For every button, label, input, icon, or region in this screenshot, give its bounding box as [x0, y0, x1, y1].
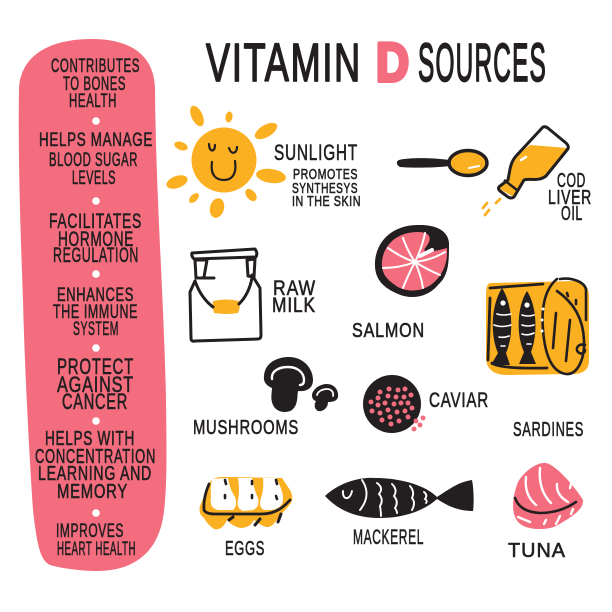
benefit: heart: HEART HEALTH	[57, 539, 136, 560]
label: cod liver oil: OIL	[561, 203, 583, 225]
benefit: concentration: HELPS WITH	[45, 428, 135, 450]
icon: caviar	[363, 375, 426, 433]
benefit: blood sugar: LEVELS	[72, 168, 116, 189]
label: raw milk: RAW	[273, 277, 316, 300]
icon: mushrooms	[264, 357, 338, 412]
benefit: cancer: AGAINST	[57, 372, 134, 397]
benefit: bones: CONTRIBUTES	[51, 56, 140, 77]
benefit: immune system: SYSTEM	[73, 319, 119, 340]
benefit: blood sugar: BLOOD SUGAR	[49, 150, 138, 171]
benefit: concentration: CONCENTRATION	[35, 446, 156, 468]
benefit: concentration: LEARNING AND	[38, 463, 152, 485]
benefit: bones: TO BONES	[63, 74, 126, 95]
benefit: cancer	[57, 354, 134, 414]
label: raw milk: MILK	[272, 294, 316, 317]
label: sunlight	[274, 140, 361, 210]
label: tuna: TUNA	[508, 540, 566, 562]
title	[206, 31, 547, 93]
benefit: bones	[51, 56, 140, 112]
label: raw milk	[272, 277, 316, 317]
benefit: hormones: HORMONE	[58, 228, 134, 251]
benefit: bones: HEALTH	[69, 91, 117, 112]
label: eggs: EGGS	[225, 538, 265, 560]
label: sunlight: IN THE SKIN	[292, 193, 361, 210]
sardine 2	[519, 291, 536, 364]
benefit: cancer: CANCER	[62, 389, 128, 414]
panel: benefits	[19, 39, 166, 571]
icon: sun	[165, 104, 287, 219]
label: cod liver oil: LIVER	[548, 187, 592, 209]
icon: sardines tin	[486, 279, 589, 375]
label: cod liver oil: COD	[557, 170, 586, 192]
benefit: hormones: REGULATION	[53, 244, 139, 267]
benefit: concentration	[35, 428, 156, 503]
icon: tuna	[513, 463, 583, 529]
label: mushrooms: MUSHROOMS	[193, 417, 299, 439]
benefit: hormones: FACILITATES	[49, 210, 142, 233]
benefit: immune system	[53, 285, 138, 340]
icon: milk can	[190, 249, 261, 341]
label: sunlight: SUNLIGHT	[274, 140, 358, 165]
benefit: concentration: MEMORY	[57, 481, 128, 503]
icon: cod liver oil bottle	[483, 127, 568, 215]
icon: mackerel	[325, 478, 474, 518]
title: D	[376, 31, 409, 93]
benefit: immune system: THE IMMUNE	[53, 302, 138, 323]
icon: spoon	[397, 150, 487, 176]
tin lid	[540, 279, 586, 374]
benefit: blood sugar	[39, 130, 153, 189]
label: mackerel: MACKEREL	[353, 526, 424, 549]
label: sunlight: SYNTHESYS	[292, 180, 358, 197]
benefit: blood sugar: HELPS MANAGE	[39, 130, 153, 151]
sardine 1	[491, 288, 511, 365]
benefit: immune system: ENHANCES	[57, 285, 134, 306]
benefit: cancer: PROTECT	[57, 354, 134, 379]
label: caviar: CAVIAR	[429, 389, 489, 412]
label: salmon: SALMON	[352, 320, 425, 342]
label: sunlight: PROMOTES	[293, 166, 358, 183]
benefit: heart	[56, 521, 136, 560]
icon: salmon	[375, 225, 449, 297]
benefit: heart: IMPROVES	[56, 521, 124, 542]
title: VITAMIN	[206, 33, 362, 93]
icon: eggs	[200, 477, 292, 529]
benefit: hormones	[49, 210, 142, 267]
label: cod liver oil	[548, 170, 592, 225]
